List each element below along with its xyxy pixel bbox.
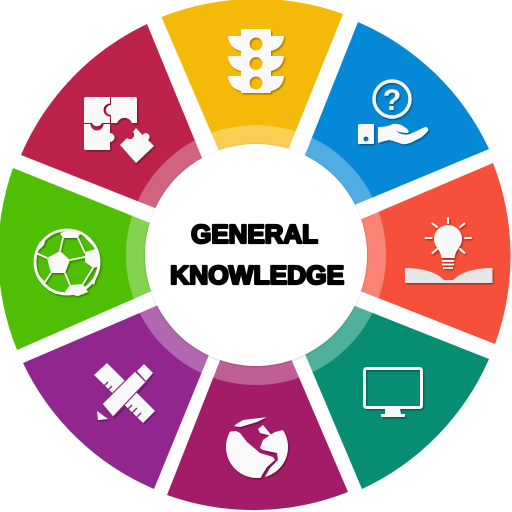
segment: traffic yellow <box>162 0 343 165</box>
segment: idea red <box>350 163 511 344</box>
segment: technology teal <box>299 300 489 489</box>
icon: ruler and pencil <box>94 363 155 423</box>
icon: soccer ball <box>35 230 100 296</box>
icon: hand with question mark: ? <box>383 84 401 117</box>
ruler notches <box>104 382 141 417</box>
segment: question blue <box>299 22 489 211</box>
icon: monitor <box>364 368 422 417</box>
bulb base <box>442 261 454 268</box>
translucent ring <box>126 125 386 385</box>
icon: light bulb over book <box>405 218 492 283</box>
icon: globe <box>224 417 292 482</box>
segment: puzzle crimson <box>21 24 207 214</box>
segment: sports green <box>0 168 170 350</box>
center circle <box>145 144 367 366</box>
bulb <box>434 225 462 258</box>
segment: tools purple <box>23 300 215 489</box>
book <box>405 268 492 283</box>
icon: hand with question mark <box>358 81 428 144</box>
segment: world magenta <box>167 340 348 510</box>
title <box>170 221 344 290</box>
icon: puzzle pieces <box>84 97 154 163</box>
icon: traffic light <box>228 29 284 93</box>
title: GENERAL <box>191 221 318 249</box>
title: KNOWLEDGE <box>170 262 344 290</box>
rays <box>426 218 471 253</box>
